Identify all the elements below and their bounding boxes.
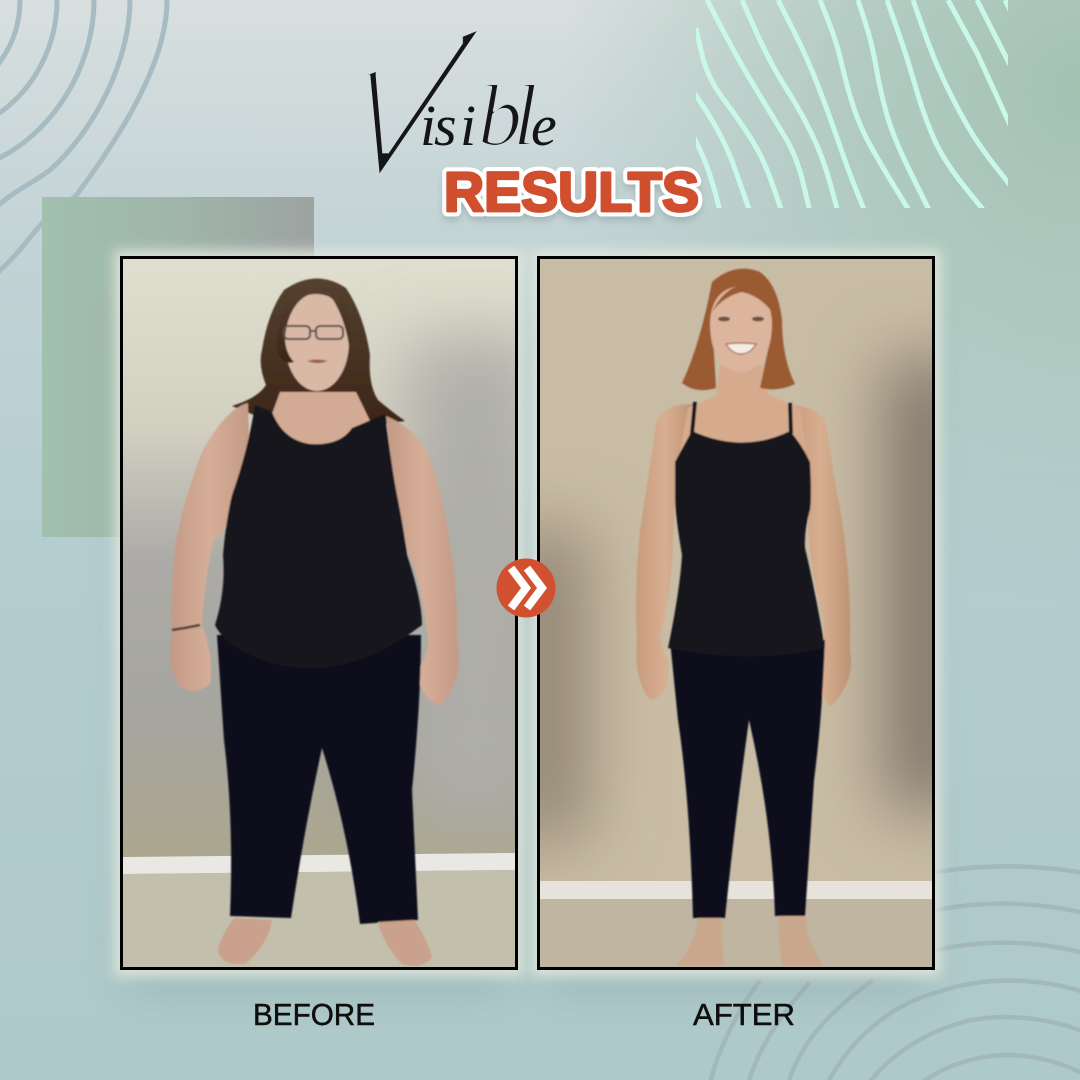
hair front bbox=[277, 290, 350, 363]
title script: Visible: i bbox=[460, 93, 476, 158]
label: after: AFTER bbox=[693, 997, 795, 1032]
straps bbox=[692, 402, 791, 434]
tank top bbox=[668, 431, 825, 656]
mouth bbox=[307, 360, 328, 363]
title bbox=[291, 0, 699, 248]
before photo panel bbox=[122, 258, 540, 968]
hair back bbox=[232, 278, 405, 430]
title script: Visible: s bbox=[434, 93, 457, 158]
carpet bbox=[123, 870, 515, 967]
pants bbox=[217, 635, 421, 924]
arms bbox=[170, 403, 250, 691]
fringe bbox=[712, 285, 772, 312]
baseboard bbox=[540, 881, 932, 899]
title bold: RESULTS: RESULTS bbox=[444, 160, 699, 223]
title bold: RESULTS: RESULTS bbox=[444, 160, 699, 223]
arrow badge bbox=[496, 558, 556, 618]
neck and chest bbox=[680, 365, 806, 450]
feet bbox=[676, 918, 724, 966]
pants bbox=[670, 640, 825, 918]
after photo panel bbox=[537, 256, 935, 970]
arms bbox=[636, 404, 694, 700]
feet bbox=[218, 918, 272, 964]
smile bbox=[726, 343, 756, 354]
double chevron icon bbox=[511, 568, 542, 608]
label: before: BEFORE bbox=[253, 997, 375, 1032]
glasses bbox=[284, 326, 343, 339]
hair bbox=[682, 269, 795, 390]
woman after bbox=[636, 269, 851, 966]
wall bbox=[123, 259, 515, 859]
carpet bbox=[540, 899, 932, 967]
panel glows and shadow bbox=[114, 250, 941, 990]
decorative arcs bottom right bbox=[710, 866, 1080, 1080]
woman before bbox=[170, 278, 459, 966]
face bbox=[285, 293, 349, 391]
title script: Visible: e bbox=[531, 93, 557, 158]
title script: Visible: b bbox=[478, 68, 522, 165]
decorative wavy lines top right bbox=[694, 0, 1010, 212]
title script: Visible: l bbox=[513, 68, 537, 165]
title script: Visible: i bbox=[420, 93, 436, 158]
title bold: RESULTS: RESULTS bbox=[444, 165, 699, 228]
eyes bbox=[718, 317, 764, 321]
wall bbox=[540, 259, 932, 884]
baseboard bbox=[123, 853, 515, 874]
decorative arcs top left bbox=[0, 0, 167, 275]
bracelet bbox=[172, 625, 200, 630]
green square accent bbox=[42, 197, 314, 537]
tank top bbox=[215, 405, 422, 668]
chest bbox=[268, 392, 372, 450]
face bbox=[710, 286, 772, 373]
